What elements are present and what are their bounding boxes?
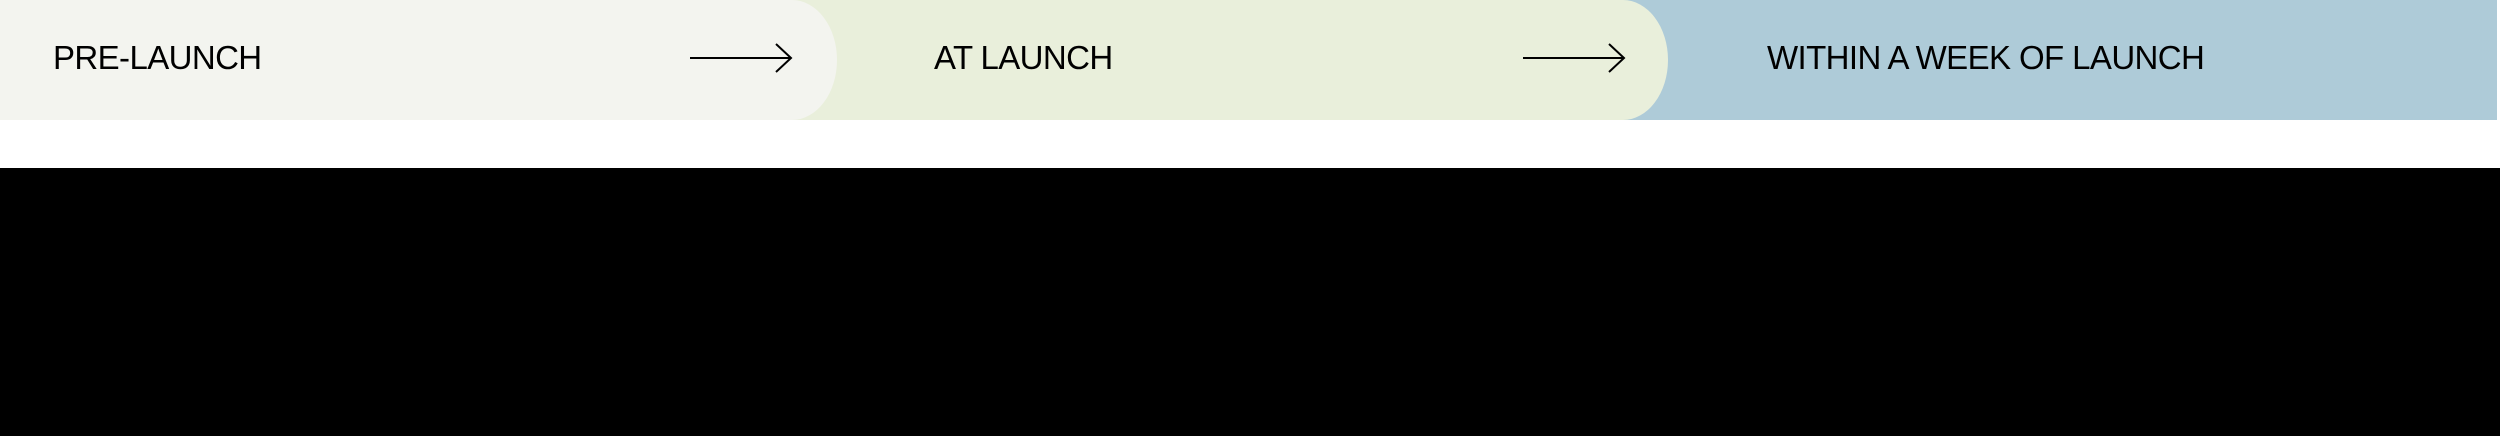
panel: at launch: [780, 0, 1668, 120]
black content area: [0, 168, 2500, 436]
panel: pre-launch: [0, 0, 837, 120]
heading: pre-launch: PRE-LAUNCH: [53, 39, 262, 76]
panel: within a week of launch: [1600, 0, 2497, 120]
heading: at launch: AT LAUNCH: [934, 39, 1113, 76]
heading: within a week of launch: WITHIN A WEEK OF LAUNCH: [1767, 39, 2204, 76]
arrow: at launch to within a week: [1523, 43, 1626, 73]
arrow: pre-launch to at launch: [690, 43, 792, 73]
